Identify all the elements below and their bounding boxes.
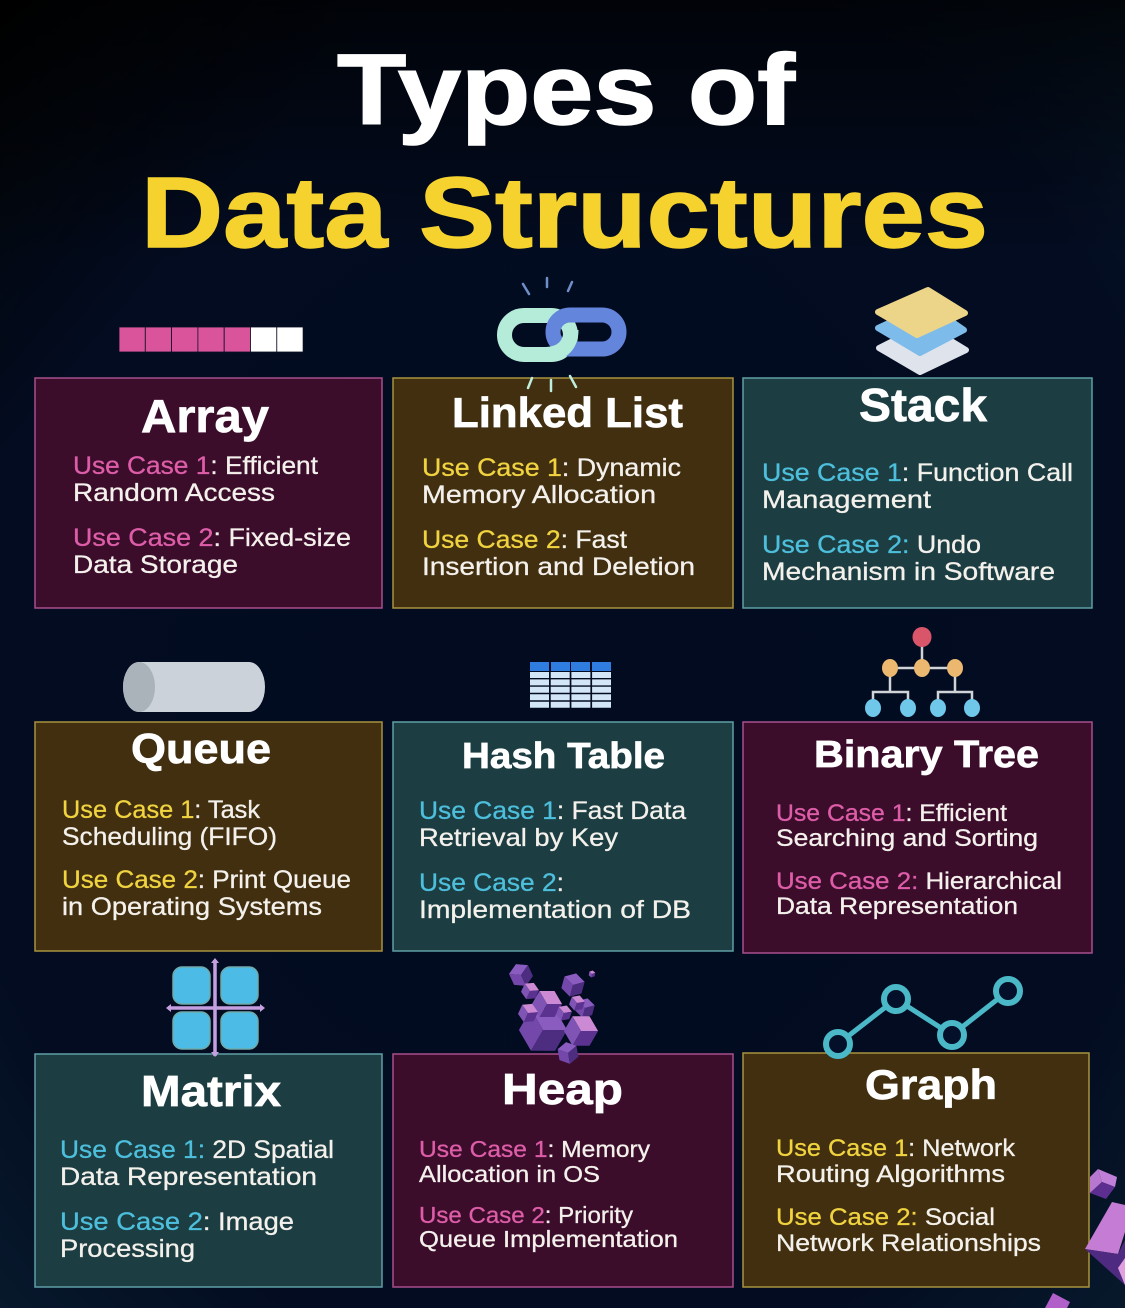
use cases: heap: Use Case 1 : Memory [419, 1136, 651, 1162]
use cases: graph: Network Relationships [776, 1230, 1041, 1257]
panel: hash table [393, 722, 733, 951]
use cases: linked list: Use Case 1 : Dynamic [422, 454, 681, 482]
use cases: linked list: Insertion and Deletion [422, 553, 695, 581]
use cases: linked list: Use Case 2 : Fast [422, 526, 627, 554]
use cases: graph: Use Case 2: Social [776, 1204, 995, 1231]
use cases: heap: Use Case 2: Priority [419, 1202, 634, 1228]
use cases: array: Data Storage [73, 551, 238, 579]
heading: matrix: Matrix [141, 1067, 282, 1116]
panel: matrix [35, 1054, 382, 1287]
heading: heap: Heap [502, 1065, 623, 1114]
panel: array [35, 378, 382, 608]
icon: matrix grid [166, 958, 265, 1057]
use cases: heap: Allocation in OS [419, 1161, 600, 1187]
use cases: array: Random Access [73, 479, 275, 507]
use cases: binary tree: Use Case 2: Hierarchical [776, 868, 1062, 895]
use cases: queue: Use Case 1: Task [62, 796, 261, 824]
use cases: matrix: Use Case 2 : Image [60, 1208, 294, 1236]
icon: hash table grid [530, 662, 611, 705]
icon: binary tree [865, 627, 980, 717]
panel: stack [743, 378, 1092, 608]
use cases: stack: Mechanism in Software [762, 558, 1055, 586]
use cases: stack: Use Case 2: Undo [762, 531, 981, 559]
panel: heap [393, 1054, 733, 1287]
use cases: stack: Management [762, 486, 931, 514]
heading: stack: Stack [859, 379, 987, 431]
heading: graph: Graph [865, 1061, 997, 1108]
heading: hash table: Hash Table [462, 735, 665, 776]
use cases: graph: Use Case 1 : Network [776, 1135, 1016, 1162]
panel: graph [743, 1053, 1089, 1287]
use cases: binary tree: Searching and Sorting [776, 825, 1038, 852]
icon: stacked layers [878, 290, 966, 372]
use cases: array: Use Case 2 : Fixed-size [73, 524, 351, 552]
icon: heap cubes [506, 960, 602, 1065]
use cases: hash table [419, 797, 691, 924]
use cases: linked list: Memory Allocation [422, 481, 656, 509]
heading: array: Array [141, 390, 269, 442]
use cases: matrix: Data Representation [60, 1163, 317, 1191]
heading: linked list: Linked List [452, 389, 683, 436]
icon: chain links [504, 278, 619, 391]
use cases: binary tree: Data Representation [776, 893, 1018, 920]
use cases: graph: Routing Algorithms [776, 1161, 1005, 1188]
use cases: queue: Scheduling (FIFO) [62, 823, 277, 851]
use cases: matrix: Processing [60, 1235, 195, 1263]
decorative cubes: lower right [1045, 1169, 1125, 1308]
use cases: hash table: Retrieval by Key [419, 824, 619, 852]
use cases: array [73, 452, 351, 579]
heading: binary tree: Binary Tree [814, 734, 1039, 776]
icon: line graph [826, 979, 1020, 1056]
use cases: heap: Queue Implementation [419, 1226, 678, 1252]
use cases: queue: in Operating Systems [62, 893, 322, 921]
title line: Data Structures: Data Structures [141, 157, 988, 269]
use cases: stack: Use Case 1 : Function Call [762, 459, 1073, 487]
use cases: matrix [60, 1136, 334, 1263]
heading: queue: Queue [131, 725, 271, 772]
use cases: hash table: Use Case 2 : [419, 869, 564, 897]
use cases: matrix: Use Case 1: 2D Spatial [60, 1136, 334, 1164]
icon: array cells [119, 327, 303, 352]
title [141, 34, 988, 269]
use cases: graph [776, 1135, 1041, 1257]
use cases: binary tree [776, 800, 1062, 920]
use cases: binary tree: Use Case 1: Efficient [776, 800, 1007, 827]
use cases: queue [62, 796, 351, 921]
use cases: array: Use Case 1 : Efficient [73, 452, 318, 480]
use cases: stack [762, 459, 1073, 586]
panel: binary tree [743, 722, 1092, 953]
use cases: hash table: Use Case 1 : Fast Data [419, 797, 686, 825]
use cases: heap [419, 1136, 678, 1252]
panel: linked list [393, 378, 733, 608]
icon: queue cylinder [123, 662, 265, 712]
use cases: queue: Use Case 2: Print Queue [62, 866, 351, 894]
title line: Types of: Types of [337, 34, 796, 146]
panel: queue [35, 722, 382, 951]
use cases: hash table: Implementation of DB [419, 896, 691, 924]
use cases: linked list [422, 454, 695, 581]
